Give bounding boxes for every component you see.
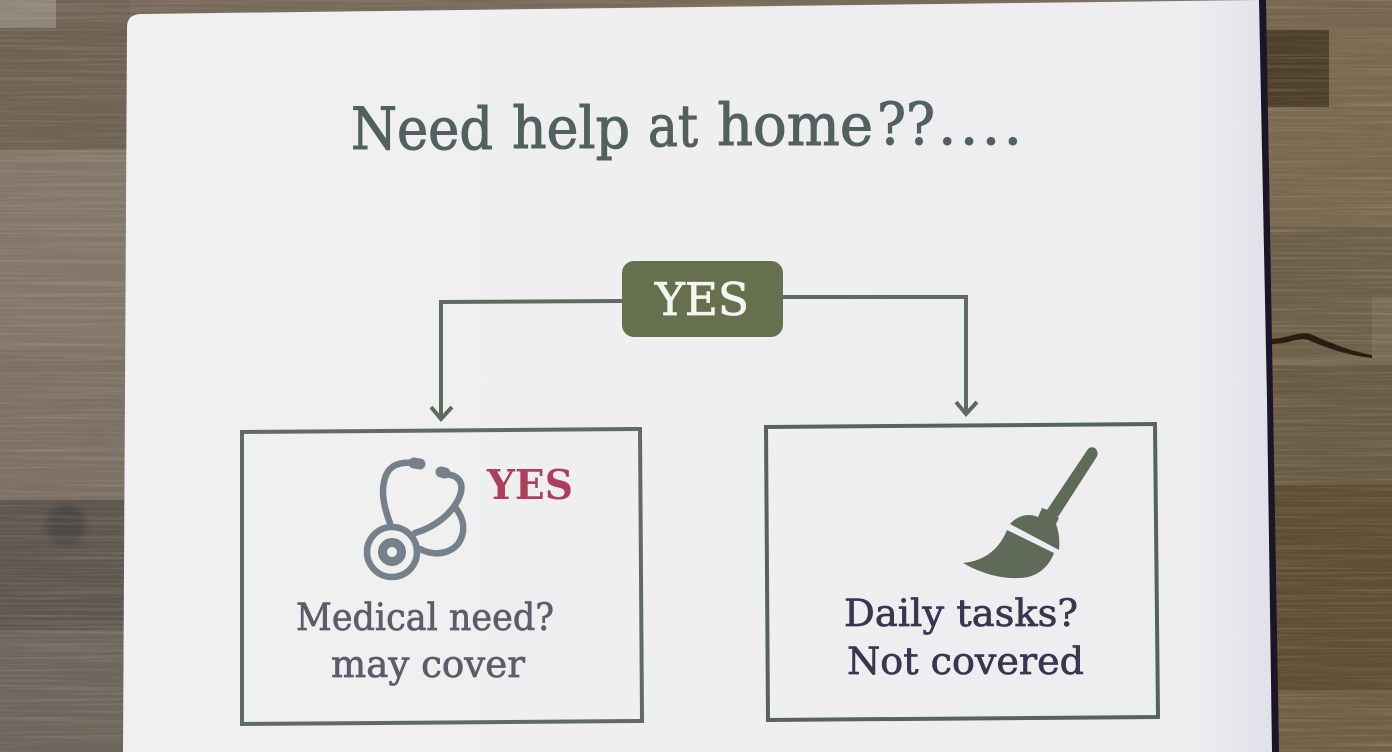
panel border: daily bbox=[766, 424, 1158, 720]
title: help bbox=[512, 94, 630, 162]
title bbox=[351, 90, 1022, 163]
panel: daily tasks bbox=[766, 424, 1158, 720]
YES decision label: YES bbox=[654, 273, 749, 326]
icon: broom bbox=[963, 447, 1098, 578]
title: .... bbox=[938, 90, 1022, 158]
title: home bbox=[717, 91, 873, 159]
YES decision box bbox=[622, 261, 783, 337]
icon: stethoscope bbox=[367, 463, 463, 577]
connector: YES to left box bbox=[431, 301, 622, 419]
panel border: medical bbox=[242, 429, 642, 724]
connector: YES to right box bbox=[783, 297, 977, 414]
arrowhead: left bbox=[431, 407, 452, 419]
arrowhead: right bbox=[956, 402, 977, 414]
panel: medical need bbox=[242, 429, 642, 724]
text: not covered: Not covered bbox=[847, 640, 1084, 683]
YES red label: YES bbox=[486, 461, 573, 509]
text: medical need: Medical need? bbox=[296, 596, 554, 639]
text: daily tasks: Daily tasks? bbox=[844, 592, 1078, 635]
paper shadow edge bbox=[1258, 0, 1279, 752]
title: at bbox=[648, 92, 698, 160]
title: ?? bbox=[877, 90, 935, 158]
title: Need bbox=[351, 95, 493, 163]
text: may cover: may cover bbox=[331, 643, 525, 686]
